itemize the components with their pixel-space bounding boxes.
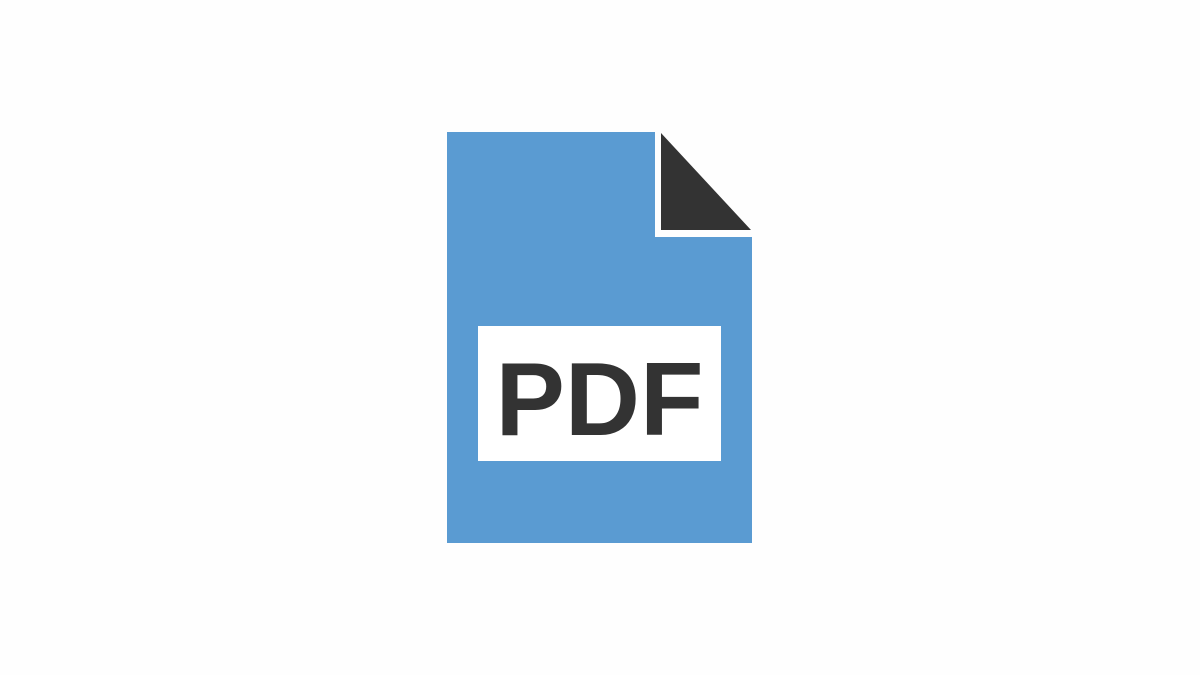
folded corner bbox=[661, 133, 751, 230]
document body bbox=[447, 132, 752, 543]
PDF text: PDF bbox=[496, 342, 704, 458]
label box bbox=[478, 326, 721, 461]
